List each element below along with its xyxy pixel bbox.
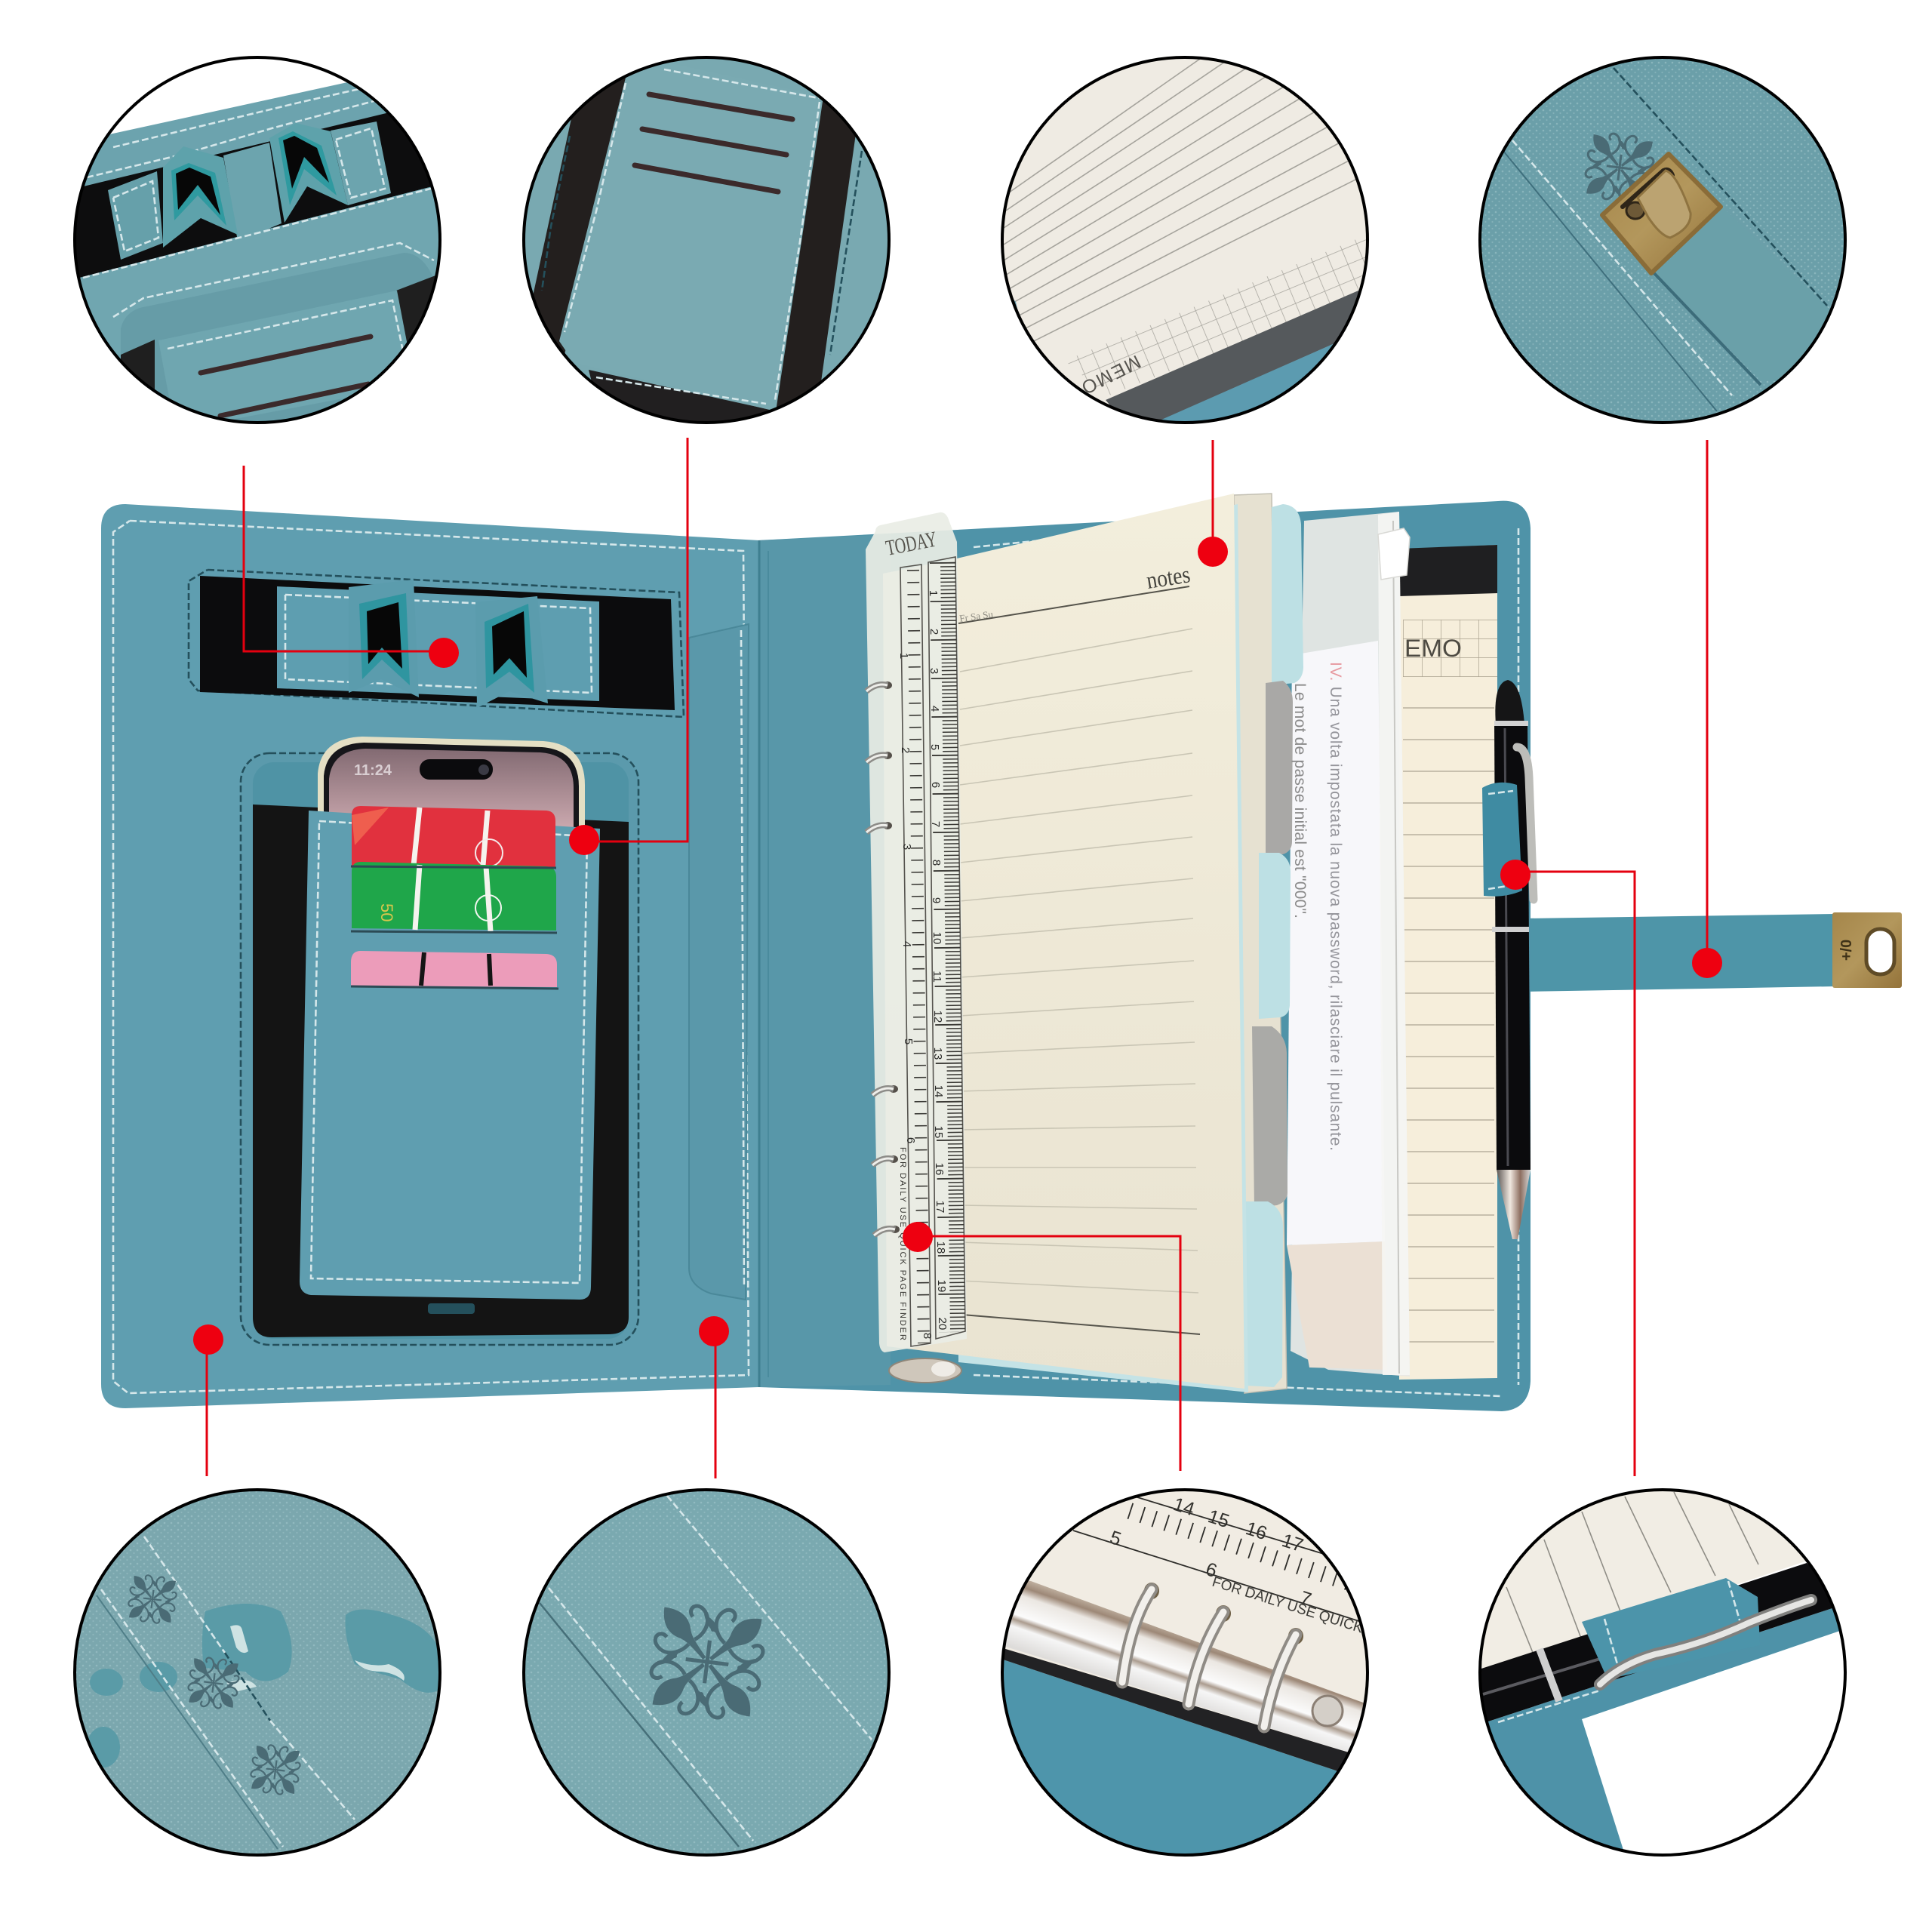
memo rules (1403, 708, 1494, 1342)
ruler numbers: 6 (1203, 1558, 1220, 1582)
strap tabs (277, 586, 599, 701)
buckle engraving: +/0 (1838, 940, 1855, 961)
ring holes (1144, 1583, 1303, 1644)
grey tab 2 (1252, 1026, 1287, 1208)
silver clip (1600, 1600, 1811, 1684)
cm numbers: 9 (930, 897, 943, 903)
inch numbers: 3 (900, 844, 913, 850)
pocket face (300, 811, 600, 1300)
clip (1517, 747, 1534, 900)
cm numbers: 16 (933, 1163, 946, 1175)
inch numbers: 5 (902, 1038, 915, 1044)
zip pull (1378, 528, 1410, 580)
bottom elastic (589, 370, 770, 421)
ruler lines (1073, 1531, 1364, 1623)
zipper strip (1378, 512, 1410, 1375)
page heading: notes: notes (1144, 560, 1192, 594)
pen with loop (1482, 680, 1534, 1239)
arrow: tie-down strap callout (244, 466, 459, 668)
cm numbers: 1 (927, 590, 940, 596)
pen barrel (1479, 1563, 1846, 1724)
cover strip under pen (1479, 1604, 1864, 1736)
teal cover below pen (1479, 1719, 1628, 1864)
cm numbers: 2 (928, 629, 940, 635)
cm numbers: 13 (931, 1048, 944, 1060)
finder label: FOR DAILY USE QUICK PAGE FINDER (898, 1147, 907, 1340)
silver ring (1540, 1649, 1559, 1701)
green card (352, 862, 556, 931)
left strap tab (108, 171, 163, 260)
pocket face (559, 60, 823, 411)
panel: detail circle, tie-down strap loops (68, 57, 453, 430)
right cover (758, 501, 1531, 1411)
silver tip (1497, 1170, 1531, 1239)
panel: detail circle, embossed emblem (522, 1490, 891, 1855)
notebook: open binder (101, 494, 1902, 1411)
page edges (1234, 494, 1287, 1393)
rivet (1312, 1696, 1343, 1726)
light blue tab 1 (1272, 504, 1303, 685)
phone pocket (241, 737, 638, 1345)
right elastic strap (776, 101, 856, 408)
black edge (1001, 1647, 1356, 1774)
stylus tip (1495, 680, 1524, 724)
binder rings (866, 681, 900, 1235)
leather cover area (80, 82, 430, 278)
cm numbers: 7 (929, 821, 942, 827)
inch numbers: 6 (904, 1137, 917, 1143)
instruction text line 1: IV. Una volta impostata la nuova password, rilasciare il pulsante. (1327, 662, 1344, 1151)
cm numbers: 12 (931, 1011, 944, 1023)
top elastic holder (189, 570, 684, 717)
red card (352, 806, 555, 868)
phone (318, 737, 585, 830)
ruler numbers (1107, 1494, 1314, 1611)
arrow: ring binder callout (903, 1222, 1180, 1471)
cm numbers (927, 590, 949, 1330)
cm numbers: 15 (932, 1126, 945, 1138)
seams (667, 1496, 872, 1740)
panel: detail circle, water resistant leather (72, 1490, 442, 1855)
inch numbers: 4 (900, 941, 913, 947)
panel: detail circle, ring binder mechanism (1001, 1490, 1460, 1864)
status time: 11:24 (354, 762, 392, 779)
ruled lines (1004, 59, 1355, 341)
memo label: MEMO (1078, 351, 1144, 398)
cm numbers: 5 (928, 744, 941, 750)
finder label: FOR DAILY USE QUICK PAGE FINDER (1210, 1574, 1460, 1666)
ruler numbers: 5 (1107, 1527, 1124, 1550)
right loop (475, 596, 548, 708)
cm numbers: 18 (934, 1241, 947, 1254)
buckle rivet (1626, 202, 1644, 219)
left loop (349, 580, 419, 697)
emblem 3 (233, 1727, 318, 1812)
right chevron loop (269, 123, 348, 223)
cm numbers: 14 (932, 1085, 945, 1097)
left chevron loop (163, 146, 238, 248)
arrow: clasp strap callout (1692, 440, 1722, 978)
instruction text line 2: Le mot de passe initial est "000". (1291, 683, 1309, 918)
silver rings (1494, 721, 1528, 726)
cm numbers: 3 (928, 668, 940, 674)
light blue tab 3 (1243, 1201, 1283, 1387)
pen barrel (1494, 721, 1531, 1170)
ruler numbers: 7 (1297, 1587, 1314, 1611)
stitch seams (101, 1589, 283, 1847)
today label: TODAY (884, 527, 939, 561)
pink card (351, 951, 557, 987)
ruler numbers: 14 (1171, 1494, 1197, 1520)
teal loop (1582, 1578, 1760, 1679)
zip pouch (1287, 512, 1410, 1377)
rivet (889, 1358, 961, 1383)
page rules (960, 629, 1198, 1293)
lower leather with recess (80, 187, 430, 278)
right strap tab (331, 122, 391, 205)
grey tab 1 (1266, 681, 1293, 857)
rings (1122, 1589, 1296, 1727)
memo label: EMO (1404, 635, 1462, 662)
teal cover (1161, 344, 1333, 421)
leather (1001, 1659, 1345, 1864)
instruction sheet (1287, 641, 1385, 1245)
panel: detail circle, card pocket (524, 57, 889, 430)
ruler numbers: 17 (1279, 1530, 1306, 1556)
arrow: pen loop callout (1500, 860, 1635, 1476)
spine (759, 534, 891, 1387)
light blue tab 2 (1259, 853, 1291, 1019)
brass strap buckle (1832, 912, 1902, 988)
buckle slot (1623, 170, 1672, 207)
cm numbers: 6 (929, 782, 942, 788)
left cover (101, 504, 759, 1408)
divider pages stack (1234, 494, 1303, 1393)
lower sheet shade (1287, 1241, 1387, 1370)
cm numbers: 19 (935, 1280, 948, 1292)
clip notch (428, 1303, 475, 1314)
strap (1657, 208, 1828, 379)
dark back board edge (1106, 291, 1377, 423)
card value: 50 (377, 903, 396, 921)
ruler numbers: 15 (1205, 1506, 1232, 1532)
bottom rule (962, 1315, 1200, 1334)
memo grid (1065, 235, 1381, 396)
pocket slot shadows (351, 866, 558, 989)
brass buckle plate (1602, 154, 1721, 273)
main planner page (883, 494, 1244, 1389)
weekday labels: Fr Sa Su (958, 608, 994, 624)
panel: detail circle, ruled memo paper (1001, 56, 1369, 424)
middle strap tab (223, 143, 281, 242)
teal pen loop (1482, 783, 1522, 897)
heading rule (958, 586, 1189, 623)
emblem 2 (170, 1639, 257, 1727)
panel: detail circle, brass clasp (1479, 57, 1846, 423)
emblem (1585, 133, 1654, 201)
water highlights (226, 1625, 405, 1691)
strap extending from cover (1524, 914, 1835, 992)
cm ticks (948, 562, 958, 1332)
seam stitching (1512, 140, 1732, 395)
inch numbers: 2 (899, 747, 912, 753)
emblem (611, 1566, 803, 1758)
emblem 1 (111, 1558, 194, 1641)
cm numbers: 11 (931, 971, 943, 983)
cm numbers: 10 (931, 932, 943, 944)
inch ticks (913, 570, 924, 1343)
inch numbers: 8 (921, 1333, 934, 1339)
cm numbers: 20 (936, 1318, 949, 1330)
black elastic band (76, 113, 430, 278)
memo pad (1399, 545, 1497, 1380)
water patches (87, 1604, 441, 1767)
cm numbers: 4 (928, 706, 941, 712)
light blue back page (957, 504, 1248, 1392)
rail (1001, 1577, 1371, 1755)
inch numbers: 1 (897, 653, 910, 659)
panel: detail circle, pen loop (1479, 1490, 1864, 1864)
card pocket with slots (158, 291, 408, 420)
ruler numbers: 16 (1243, 1518, 1269, 1544)
cm numbers: 8 (930, 860, 943, 866)
paper lines (1506, 1492, 1758, 1669)
arrow: card pocket callout (569, 438, 688, 855)
cm numbers: 17 (934, 1201, 946, 1213)
arrow: stitching callout (699, 1316, 729, 1478)
inch numbers (897, 653, 934, 1339)
ruler outlines (900, 565, 931, 1346)
side document pocket (689, 624, 749, 1300)
buckle latch (1638, 171, 1690, 238)
arrow: memo paper callout (1198, 440, 1228, 567)
left elastic strap (533, 78, 626, 353)
dynamic island (420, 759, 493, 780)
black elastic back (253, 804, 629, 1337)
arrow: leather cover callout (193, 1324, 223, 1476)
paper (1479, 1490, 1847, 1672)
ruler bookmark (866, 512, 967, 1352)
